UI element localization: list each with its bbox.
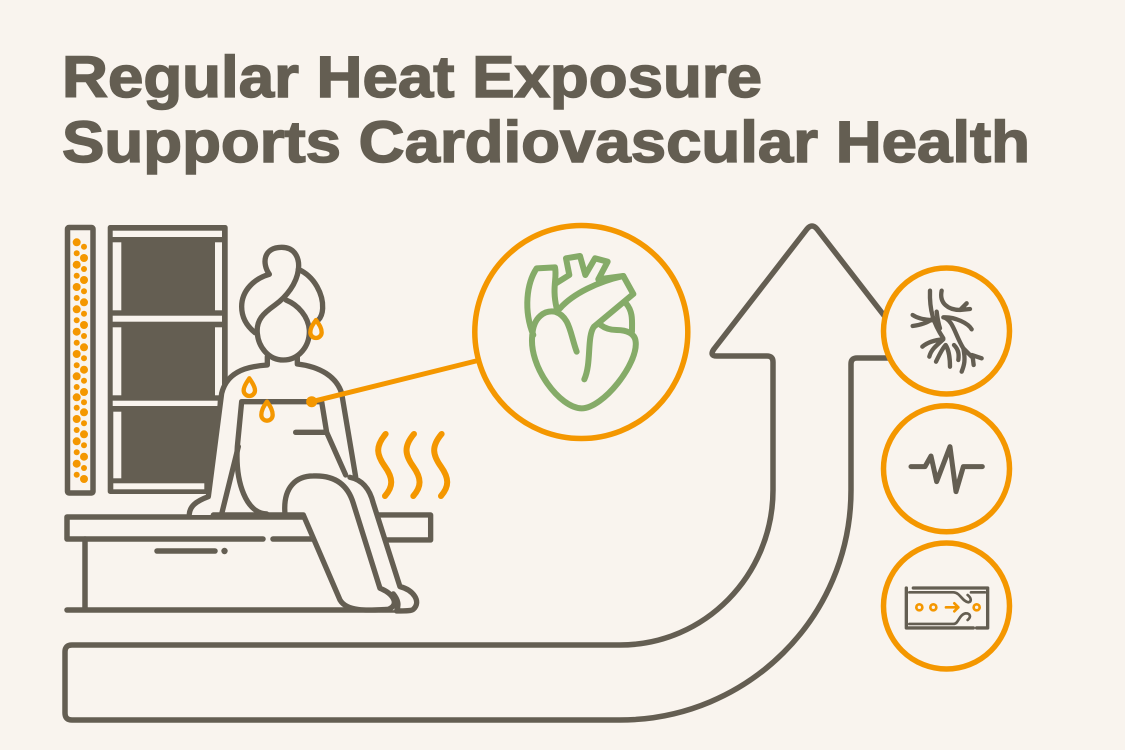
legs [213, 476, 431, 611]
icon: branching vessels [913, 291, 982, 372]
icon: heart [527, 256, 636, 408]
body silhouette fill [189, 353, 417, 611]
circle: heart [475, 226, 688, 438]
arrow [65, 226, 911, 720]
circle: heartbeat [884, 406, 1010, 532]
pointer line [306, 360, 478, 407]
title: Regular Heat Exposure [62, 45, 762, 110]
steam [378, 434, 447, 496]
head and turban [242, 247, 323, 360]
title: Supports Cardiovascular Health [62, 110, 1030, 175]
sweat drops [244, 320, 322, 421]
bench [67, 517, 410, 610]
woman in towel [189, 247, 431, 611]
circle: artery flow [884, 543, 1010, 669]
title [62, 45, 1030, 175]
torso and arms [189, 357, 356, 514]
icon: pulse line [911, 447, 982, 492]
infrared heater panel [68, 228, 93, 493]
window [108, 225, 228, 494]
icon: artery with blood flow [906, 588, 988, 628]
circle: blood vessels [884, 268, 1010, 394]
